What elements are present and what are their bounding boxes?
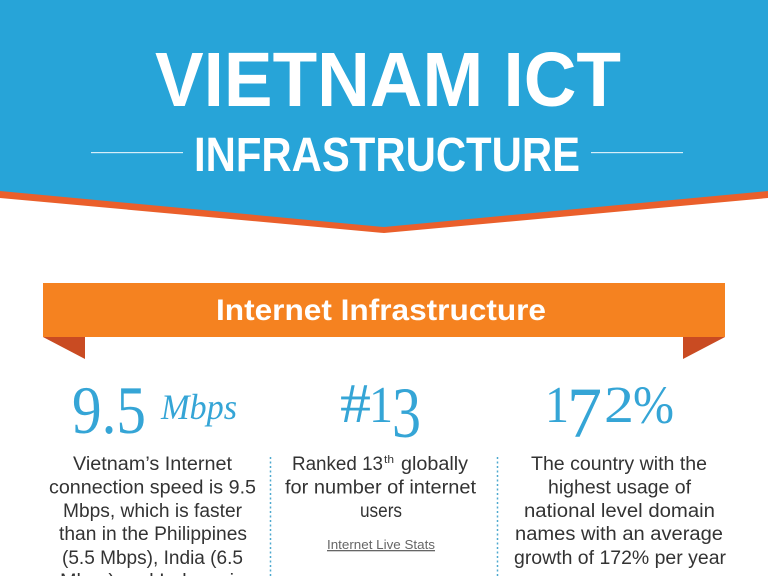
description: domain growth: growth of 172% per year — [514, 548, 727, 569]
subtitle with side rules: INFRASTRUCTURE — [194, 129, 580, 182]
description: global rank — [285, 454, 477, 522]
stat: 9.5 Mbps: Mbps — [160, 387, 237, 427]
description: domain growth: highest usage of — [548, 478, 692, 498]
stat: 9.5 Mbps: 9.5 — [72, 372, 146, 448]
source link: Internet Live Stats — [327, 537, 436, 552]
divider right — [496, 457, 498, 576]
description: connection speed — [49, 454, 256, 576]
description: global rank: users — [360, 501, 402, 522]
section ribbon: Internet Infrastructure — [43, 283, 725, 359]
description: domain growth — [514, 454, 727, 569]
description: domain growth: national level domain — [524, 501, 715, 522]
description: connection speed: than in the Philippines — [59, 524, 247, 545]
stat column: connection speed — [49, 372, 256, 576]
stat: 172%: 7 — [567, 373, 602, 453]
stat: 172% — [545, 373, 674, 453]
description: domain growth: names with an average — [515, 524, 723, 545]
description: global rank: for number of internet — [285, 478, 477, 498]
stat: #13: # — [340, 373, 371, 435]
description: connection speed: connection speed is 9.5 — [49, 478, 256, 498]
description: connection speed: Vietnam’s Internet — [73, 454, 233, 475]
description: connection speed: (5.5 Mbps), India (6.5 — [62, 548, 243, 569]
header banner — [0, 0, 768, 233]
title: VIETNAM ICT — [155, 37, 621, 123]
section ribbon: Internet Infrastructure: Internet Infrastructure — [216, 294, 546, 327]
stat column: domain growth — [514, 373, 727, 569]
description: global rank: Ranked 13 — [292, 454, 383, 475]
stat: 172%: % — [633, 375, 674, 435]
stat column: global rank — [285, 373, 477, 552]
stat: 172%: 1 — [545, 377, 569, 434]
stat: #13 — [340, 373, 421, 453]
stat: 9.5 Mbps — [72, 372, 237, 448]
description: global rank: th — [384, 454, 394, 466]
description: global rank: globally — [401, 454, 469, 475]
description: connection speed: Mbps, which is faster — [63, 501, 243, 522]
stat: #13: 3 — [392, 373, 421, 453]
stat: 172%: 2 — [604, 377, 634, 434]
description: domain growth: The country with the — [531, 454, 707, 475]
stat: #13: 1 — [369, 377, 393, 434]
divider left — [270, 457, 272, 576]
